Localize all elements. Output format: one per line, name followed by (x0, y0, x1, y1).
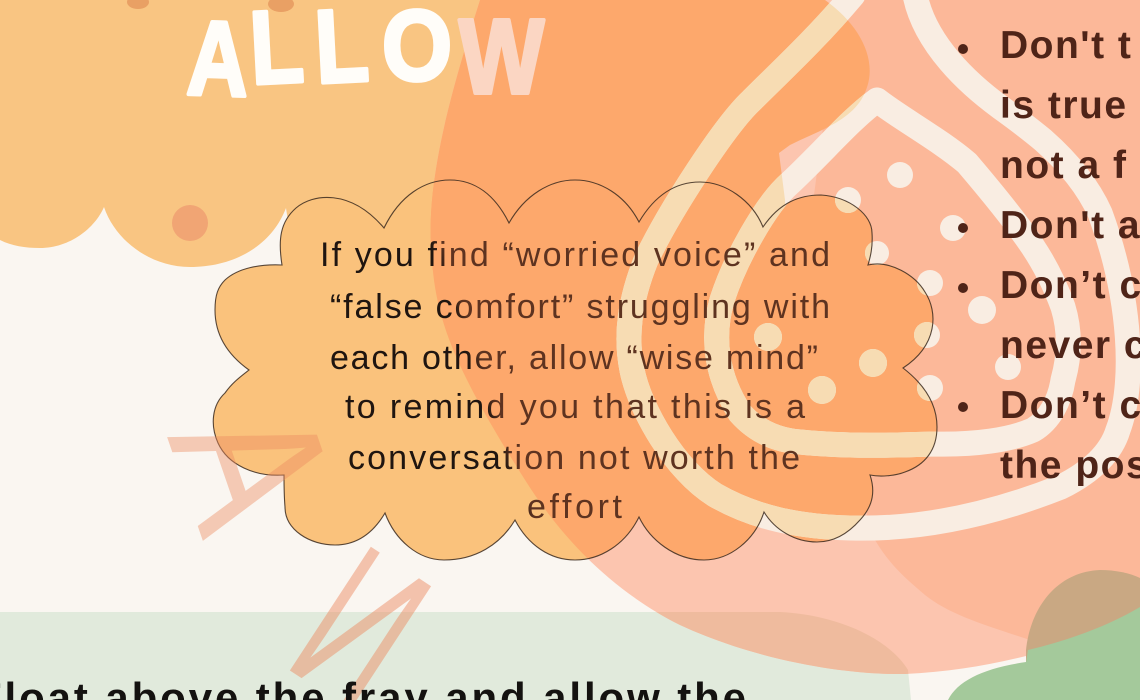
line 6: effort (527, 488, 623, 526)
letter A: A (185, 0, 251, 119)
line 4: to remind you that this is a (345, 388, 805, 426)
green hill (948, 607, 1140, 700)
orange shape inside cloud (433, 196, 936, 560)
cloud outline (213, 180, 937, 560)
bullet 4 (958, 384, 1140, 487)
line 1: If you find “worried voice” and (320, 236, 830, 274)
bullet 1: not a f (1000, 144, 1127, 187)
brown hill (1026, 570, 1140, 700)
panel: peach blob (431, 0, 1140, 674)
title: ALLOW (185, 0, 544, 119)
bullet 1: Don't t (1000, 24, 1132, 67)
line 3: each other, allow “wise mind” (330, 339, 818, 377)
panel: green band at bottom (0, 612, 911, 700)
orange shape at top (434, 0, 870, 222)
fig rings and seeds (629, 0, 1128, 528)
line 5: conversation not worth the (348, 439, 800, 477)
bullet 2: Don't a (1000, 204, 1140, 247)
band overlap with peach blob (656, 612, 908, 674)
icon: orange dot on blob (172, 205, 208, 241)
bullet 1 (958, 24, 1132, 187)
cloud fill (213, 180, 937, 560)
bullet 1: is true (1000, 84, 1128, 127)
panel: yellow scalloped blob (0, 0, 520, 300)
rotated watermark letter A: A (125, 376, 380, 556)
fig rings over orange (616, 4, 936, 540)
marks cut off at top edge (127, 0, 294, 12)
darker peach region (800, 0, 1140, 640)
bullet 4: Don’t c (1000, 384, 1140, 427)
line 2: “false comfort” struggling with (330, 288, 830, 326)
bullet list at right (958, 24, 1140, 487)
letter W: W (459, 0, 544, 116)
callout: cloud text (320, 236, 830, 526)
bullet 3 (958, 264, 1140, 367)
bullet 3: Don’t c (1000, 264, 1140, 307)
